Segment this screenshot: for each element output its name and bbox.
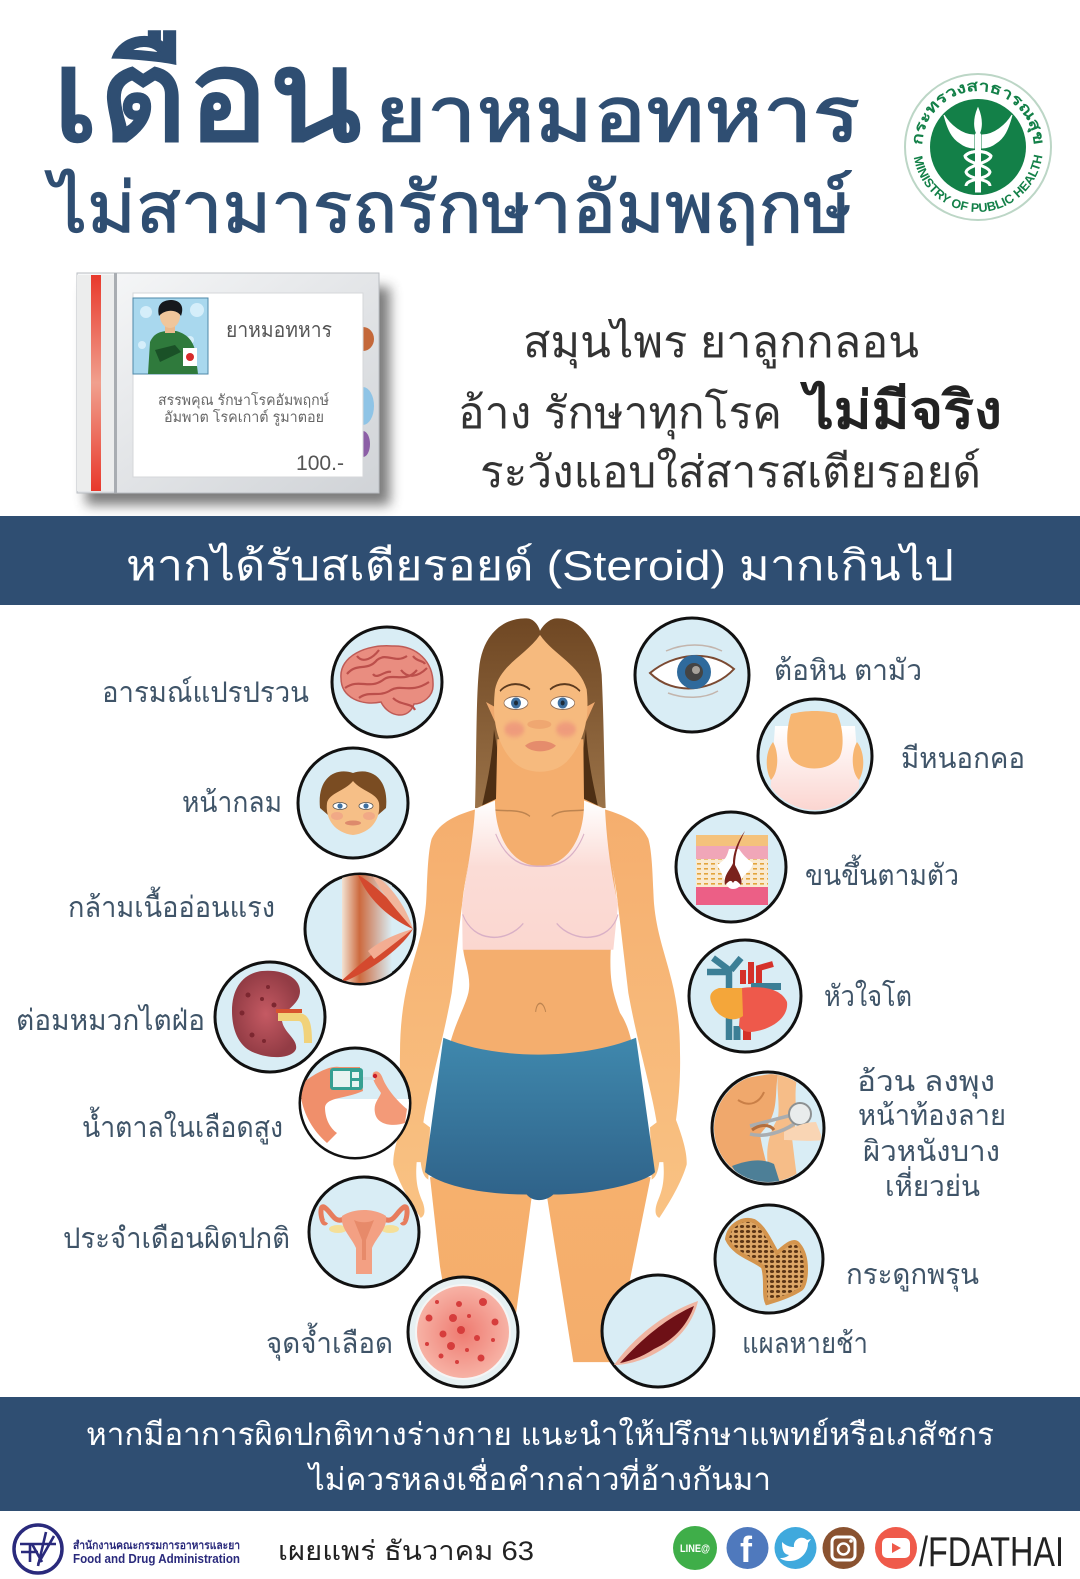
logo: Ministry of Public Health: กระทรวงสาธารณสุข bbox=[914, 82, 1043, 144]
label: buffalo hump: มีหนอกคอ bbox=[901, 743, 1025, 775]
advice band bbox=[0, 1397, 1080, 1511]
booklet illustration bbox=[77, 273, 390, 505]
icon: youtube bbox=[875, 1527, 917, 1569]
warning line three: ระวังแอบใส่สารสเตียรอยด์ bbox=[480, 447, 981, 497]
icon: line bbox=[673, 1526, 717, 1570]
symptom: brain bbox=[332, 627, 442, 737]
label: glaucoma: ต้อหิน ตามัว bbox=[774, 655, 922, 687]
booklet title: ยาหมอทหาร bbox=[226, 319, 332, 342]
booklet spine bbox=[77, 275, 117, 491]
face bbox=[494, 635, 587, 772]
eyebrows bbox=[500, 684, 580, 691]
shorts bbox=[425, 1038, 655, 1200]
label: osteoporosis: กระดูกพรุน bbox=[846, 1259, 979, 1292]
agency name english: Food and Drug Administration bbox=[73, 1552, 240, 1566]
advice band: ไม่ควรหลงเชื่อคำกล่าวที่อ้างกันมา bbox=[306, 1458, 771, 1497]
label: round face: หน้ากลม bbox=[182, 787, 282, 819]
symptom: high blood sugar bbox=[300, 1048, 410, 1159]
warning line one: สมุนไพร ยาลูกกลอน bbox=[523, 317, 919, 369]
heading band: หากได้รับสเตียรอยด์ (Steroid) มากเกินไป bbox=[126, 542, 954, 589]
eyes bbox=[504, 697, 575, 709]
logo: Ministry of Public Health bbox=[904, 73, 1052, 221]
logo: Ministry of Public Health: MINISTRY OF PUBLIC HEALTH bbox=[914, 154, 1042, 212]
label: obesity group: อ้วน ลงพุง bbox=[857, 1066, 995, 1099]
icon: twitter bbox=[774, 1527, 816, 1569]
symptom: slow healing wound bbox=[602, 1275, 714, 1387]
symptom: weak muscle bbox=[305, 874, 415, 984]
icon: facebook bbox=[726, 1527, 768, 1570]
title bbox=[45, 23, 860, 247]
symptom: irregular period, uterus bbox=[309, 1177, 419, 1287]
title line one large word: เตือน bbox=[52, 23, 362, 169]
crop top bbox=[462, 800, 618, 950]
publication date: เผยแพร่ ธันวาคม 63 bbox=[278, 1536, 534, 1566]
coloured page tabs bbox=[352, 327, 374, 457]
soldier portrait bbox=[133, 298, 208, 374]
booklet claim line one: สรรพคุณ รักษาโรคอัมพฤกษ์ bbox=[158, 391, 329, 409]
left arm bbox=[393, 809, 477, 1218]
symptom: excess body hair bbox=[676, 812, 786, 922]
warning text block bbox=[458, 317, 1002, 497]
symptom: round face bbox=[298, 748, 408, 858]
nose bbox=[527, 720, 551, 729]
legs bbox=[430, 1177, 651, 1362]
icon: line: LINE@ bbox=[680, 1543, 710, 1555]
heading band bbox=[0, 516, 1080, 605]
torso bbox=[443, 739, 637, 1078]
label: obesity group: เหี่ยวย่น bbox=[885, 1166, 980, 1203]
symptom: bruise spots bbox=[408, 1277, 518, 1387]
label: bruise spots: จุดจ้ำเลือด bbox=[266, 1322, 393, 1361]
label: irregular period: ประจำเดือนผิดปกติ bbox=[63, 1223, 290, 1255]
booklet cover card bbox=[133, 293, 363, 477]
warning emphasis: ไม่มีจริง bbox=[799, 380, 1002, 440]
label: enlarged heart: หัวใจโต bbox=[824, 979, 912, 1013]
symptom: eye bbox=[635, 618, 749, 732]
booklet claim line two: อัมพาต โรคเกาต์ รูมาตอย bbox=[164, 408, 324, 426]
cheeks bbox=[504, 722, 576, 737]
label: high blood sugar: น้ำตาลในเลือดสูง bbox=[82, 1106, 283, 1145]
title line two: ไม่สามารถรักษาอัมพฤกษ์ bbox=[45, 169, 852, 247]
label: mood swings: อารมณ์แปรปรวน bbox=[102, 676, 309, 709]
advice band: หากมีอาการผิดปกติทางร่างกาย แนะนำให้ปรึกษาแพทย์หรือเภสัชกร bbox=[86, 1417, 994, 1452]
lips bbox=[525, 741, 556, 751]
booklet price: 100.- bbox=[296, 452, 344, 475]
label: obesity group: หน้าท้องลาย bbox=[858, 1100, 1006, 1132]
social icons bbox=[673, 1526, 1064, 1575]
label: adrenal atrophy: ต่อมหมวกไตฝ่อ bbox=[16, 1003, 205, 1037]
label: excess hair: ขนขึ้นตามตัว bbox=[805, 854, 959, 892]
hair bbox=[475, 618, 606, 808]
right arm bbox=[603, 809, 687, 1218]
label: obesity group bbox=[857, 1066, 1006, 1203]
icon: instagram bbox=[822, 1527, 864, 1569]
title line one rest: ยาหมอทหาร bbox=[375, 73, 860, 158]
symptom: enlarged heart bbox=[689, 940, 801, 1052]
warning line two: อ้าง รักษาทุกโรค bbox=[458, 388, 782, 440]
ears bbox=[486, 702, 595, 722]
label: slow healing wound: แผลหายช้า bbox=[742, 1328, 868, 1360]
symptom: osteoporosis bone bbox=[715, 1205, 823, 1313]
symptom: obesity, stretch marks, thin skin bbox=[712, 1072, 824, 1184]
label: obesity group: ผิวหนังบาง bbox=[863, 1136, 1000, 1168]
symptom: shrunken adrenal kidney bbox=[215, 962, 325, 1072]
logo: Food and Drug Administration bbox=[14, 1525, 240, 1573]
symptom: buffalo hump bbox=[758, 699, 872, 813]
icon: facebook: f bbox=[740, 1529, 753, 1570]
label: weak muscle: กล้ามเนื้ออ่อนแรง bbox=[68, 886, 275, 924]
central female figure bbox=[393, 618, 687, 1362]
agency name thai: สำนักงานคณะกรรมการอาหารและยา bbox=[73, 1538, 240, 1552]
